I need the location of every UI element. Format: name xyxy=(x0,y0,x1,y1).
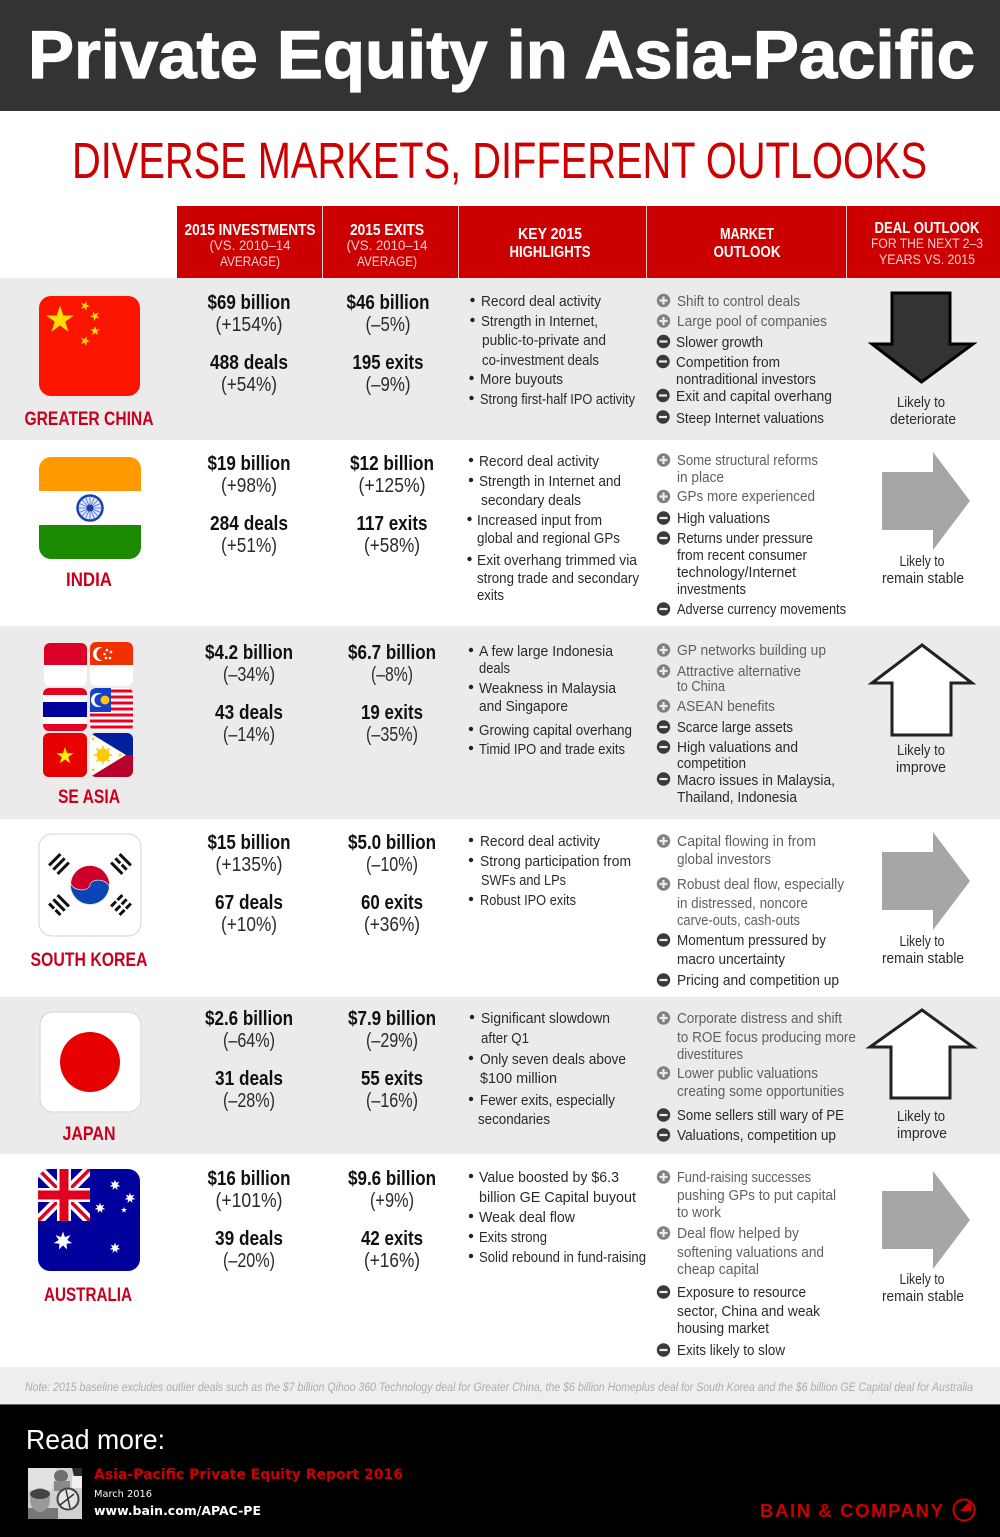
investments stats: (+98%) xyxy=(221,475,277,497)
exits stats: 117 exits xyxy=(356,513,428,535)
deal outlook caption xyxy=(897,1109,947,1142)
report date: March 2016 xyxy=(94,1489,152,1500)
arrow: stable xyxy=(882,1171,970,1269)
key highlights: Significant slowdown xyxy=(481,1011,610,1027)
table header: (VS. 2010–14 xyxy=(210,238,291,253)
icon: Vietnam flag xyxy=(43,733,87,777)
investments stats: (+51%) xyxy=(221,535,277,557)
market outlook: creating some opportunities xyxy=(677,1084,844,1100)
key highlights: Growing capital overhang xyxy=(479,723,632,739)
exits stats: (+125%) xyxy=(358,475,426,497)
key highlights: Exits strong xyxy=(479,1230,547,1246)
investments stats: 39 deals xyxy=(215,1228,283,1250)
exits stats: (–16%) xyxy=(366,1090,418,1112)
market outlook xyxy=(657,643,835,806)
market outlook: Corporate distress and shift xyxy=(677,1011,842,1027)
market outlook: Capital flowing in from xyxy=(677,834,816,850)
key highlights: $100 million xyxy=(480,1071,557,1087)
deal outlook caption xyxy=(890,395,956,428)
key highlights: Exit overhang trimmed via xyxy=(477,553,638,569)
market outlook: Competition from xyxy=(676,355,780,371)
exits stats: (–10%) xyxy=(366,854,418,876)
exits stats: $5.0 billion xyxy=(348,832,436,854)
investments stats: (–64%) xyxy=(223,1030,275,1052)
exits stats: (+9%) xyxy=(370,1190,414,1212)
key highlights: exits xyxy=(477,588,504,604)
investments stats: 31 deals xyxy=(215,1068,283,1090)
table header: AVERAGE) xyxy=(357,254,417,269)
icon: Japan flag xyxy=(40,1012,141,1112)
deal outlook caption: Likely to xyxy=(897,1109,945,1125)
exits stats: 55 exits xyxy=(361,1068,423,1090)
deal outlook caption: Likely to xyxy=(900,934,944,950)
arrow: stable xyxy=(882,452,970,550)
arrow: deteriorate xyxy=(872,293,973,382)
key highlights: global and regional GPs xyxy=(477,531,620,547)
exits stats xyxy=(348,832,436,936)
exits stats: (–29%) xyxy=(366,1030,418,1052)
key highlights: Robust IPO exits xyxy=(480,893,576,909)
market outlook: Exit and capital overhang xyxy=(676,389,832,405)
region name: AUSTRALIA xyxy=(44,1285,132,1306)
icon: Indonesia flag xyxy=(44,643,87,686)
market outlook xyxy=(657,834,845,989)
investments stats: 284 deals xyxy=(210,513,288,535)
market outlook: Fund-raising successes xyxy=(677,1170,811,1186)
panel: South Korea xyxy=(30,832,970,989)
exits stats: $7.9 billion xyxy=(348,1008,436,1030)
investments stats: (–34%) xyxy=(223,664,275,686)
market outlook: ASEAN benefits xyxy=(677,699,775,715)
investments stats: 67 deals xyxy=(215,892,283,914)
deal outlook caption: Likely to xyxy=(900,554,944,570)
panel: Australia xyxy=(38,1168,970,1359)
market outlook xyxy=(657,453,846,618)
key highlights: Fewer exits, especially xyxy=(480,1093,616,1109)
arrow: improve xyxy=(870,1010,973,1098)
report url: www.bain.com/APAC-PE xyxy=(94,1503,261,1518)
panel: Greater China xyxy=(0,278,1000,440)
key highlights xyxy=(469,294,636,408)
region name: GREATER CHINA xyxy=(24,409,154,430)
deal outlook caption: deteriorate xyxy=(890,412,956,428)
market outlook: Steep Internet valuations xyxy=(676,411,824,427)
market outlook: Robust deal flow, especially xyxy=(677,877,845,893)
key highlights: Timid IPO and trade exits xyxy=(479,742,625,758)
investments stats xyxy=(208,292,290,396)
deal outlook caption: improve xyxy=(897,1126,947,1142)
market outlook: pushing GPs to put capital xyxy=(677,1188,836,1204)
exits stats: $46 billion xyxy=(346,292,430,314)
exits stats: (–35%) xyxy=(366,724,418,746)
market outlook: Pricing and competition up xyxy=(677,973,839,989)
table header: 2015 EXITS xyxy=(350,222,424,239)
region name: INDIA xyxy=(66,570,112,591)
key highlights xyxy=(469,1170,646,1266)
key highlights: Weakness in Malaysia xyxy=(479,681,617,697)
table header: MARKET xyxy=(720,226,774,243)
region name: SOUTH KOREA xyxy=(30,950,148,971)
table header: OUTLOOK xyxy=(714,244,781,261)
deal outlook caption: Likely to xyxy=(897,395,945,411)
market outlook: global investors xyxy=(677,852,771,868)
exits stats: (+36%) xyxy=(364,914,420,936)
investments stats xyxy=(205,642,293,746)
exits stats: $9.6 billion xyxy=(348,1168,436,1190)
exits stats: $12 billion xyxy=(350,453,434,475)
market outlook: from recent consumer xyxy=(677,548,807,564)
market outlook: to ROE focus producing more xyxy=(677,1030,856,1046)
key highlights xyxy=(469,834,631,909)
market outlook: Scarce large assets xyxy=(677,720,793,736)
deal outlook caption: improve xyxy=(896,760,946,776)
investments stats: (–28%) xyxy=(223,1090,275,1112)
market outlook: competition xyxy=(677,756,746,772)
key highlights: deals xyxy=(479,661,510,677)
market outlook: in distressed, noncore xyxy=(677,896,808,912)
deal outlook caption: Likely to xyxy=(900,1272,944,1288)
market outlook: High valuations xyxy=(677,511,770,527)
market outlook xyxy=(656,294,832,427)
key highlights: Increased input from xyxy=(477,513,602,529)
market outlook: to work xyxy=(677,1205,722,1221)
panel: Japan xyxy=(0,997,1000,1154)
icon: Australia flag xyxy=(38,1169,140,1271)
deal outlook caption: remain stable xyxy=(882,1289,964,1305)
investments stats: (+154%) xyxy=(216,314,282,336)
exits stats: (–9%) xyxy=(366,374,410,396)
exits stats xyxy=(348,1008,436,1112)
market outlook: cheap capital xyxy=(677,1262,759,1278)
key highlights: and Singapore xyxy=(479,699,568,715)
investments stats: $19 billion xyxy=(208,453,290,475)
key highlights: Record deal activity xyxy=(481,294,602,310)
key highlights: Record deal activity xyxy=(479,454,600,470)
investments stats: (+135%) xyxy=(216,854,282,876)
investments stats: (–14%) xyxy=(223,724,275,746)
exits stats: 60 exits xyxy=(361,892,423,914)
investments stats: (+10%) xyxy=(221,914,277,936)
key highlights: after Q1 xyxy=(481,1031,529,1047)
investments stats: $15 billion xyxy=(208,832,290,854)
market outlook: Shift to control deals xyxy=(677,294,800,310)
exits stats: (–5%) xyxy=(366,314,410,336)
Bain logo: BAIN & COMPANY xyxy=(760,1500,944,1521)
investments stats: (+101%) xyxy=(216,1190,282,1212)
market outlook: divestitures xyxy=(677,1047,743,1063)
key highlights xyxy=(467,454,640,604)
market outlook: Some structural reforms xyxy=(677,453,818,469)
key highlights: secondaries xyxy=(478,1112,550,1128)
market outlook xyxy=(657,1170,836,1359)
market outlook: Thailand, Indonesia xyxy=(677,790,798,806)
market outlook: softening valuations and xyxy=(677,1245,824,1261)
key highlights: Record deal activity xyxy=(480,834,601,850)
market outlook: Exposure to resource xyxy=(677,1285,806,1301)
key highlights: secondary deals xyxy=(481,493,581,509)
arrow: stable xyxy=(882,832,970,930)
read more heading: Read more: xyxy=(26,1424,165,1455)
exits stats xyxy=(346,292,430,396)
investments stats xyxy=(208,453,290,557)
market outlook: technology/Internet xyxy=(677,565,796,581)
table header xyxy=(177,206,1000,278)
region name: JAPAN xyxy=(62,1124,116,1145)
exits stats xyxy=(350,453,434,557)
exits stats: (+58%) xyxy=(364,535,420,557)
table header: DEAL OUTLOOK xyxy=(874,220,980,237)
exits stats: (–8%) xyxy=(371,664,413,686)
key highlights xyxy=(469,644,632,758)
investments stats: 43 deals xyxy=(215,702,283,724)
investments stats: $69 billion xyxy=(208,292,290,314)
market outlook xyxy=(657,1011,856,1144)
market outlook: Lower public valuations xyxy=(677,1066,818,1082)
investments stats: $4.2 billion xyxy=(205,642,293,664)
market outlook: carve-outs, cash-outs xyxy=(677,913,800,929)
region name: SE ASIA xyxy=(58,787,120,808)
exits stats: 42 exits xyxy=(361,1228,423,1250)
icon: India flag xyxy=(39,457,141,559)
icon: Thailand flag xyxy=(43,688,87,731)
market outlook: Returns under pressure xyxy=(677,531,813,547)
panel: SE Asia xyxy=(0,626,1000,819)
icon: Philippines flag xyxy=(90,733,133,777)
market outlook: Slower growth xyxy=(676,335,763,351)
key highlights: Value boosted by $6.3 xyxy=(479,1170,619,1186)
key highlights: Strength in Internet and xyxy=(479,474,621,490)
exits stats: 195 exits xyxy=(352,352,424,374)
deal outlook caption xyxy=(882,554,964,587)
investments stats: $2.6 billion xyxy=(205,1008,293,1030)
icon: report cover xyxy=(28,1468,82,1519)
market outlook: Macro issues in Malaysia, xyxy=(677,773,835,789)
icon: China flag xyxy=(39,296,140,396)
market outlook: Some sellers still wary of PE xyxy=(677,1108,844,1124)
market outlook: Exits likely to slow xyxy=(677,1343,785,1359)
panel: India xyxy=(39,452,970,618)
deal outlook caption xyxy=(896,743,946,776)
market outlook: Adverse currency movements xyxy=(677,602,846,618)
market outlook: Momentum pressured by xyxy=(677,933,827,949)
exits stats: $6.7 billion xyxy=(348,642,436,664)
key highlights: A few large Indonesia xyxy=(479,644,614,660)
exits stats: (+16%) xyxy=(364,1250,420,1272)
deal outlook caption xyxy=(882,1272,964,1305)
market outlook: housing market xyxy=(677,1321,769,1337)
investments stats xyxy=(208,1168,290,1272)
market outlook: Valuations, competition up xyxy=(677,1128,836,1144)
deal outlook caption: remain stable xyxy=(882,571,964,587)
market outlook: sector, China and weak xyxy=(677,1304,821,1320)
investments stats: (+54%) xyxy=(221,374,277,396)
table header: KEY 2015 xyxy=(518,226,582,243)
key highlights: Weak deal flow xyxy=(479,1210,576,1226)
deal outlook caption xyxy=(882,934,964,967)
key highlights xyxy=(469,1011,626,1128)
investments stats: (–20%) xyxy=(223,1250,275,1272)
key highlights: SWFs and LPs xyxy=(481,873,566,889)
key highlights: Only seven deals above xyxy=(480,1052,626,1068)
market outlook: High valuations and xyxy=(677,740,798,756)
investments stats xyxy=(208,832,290,936)
footer xyxy=(0,1404,1000,1537)
key highlights: public-to-private and xyxy=(482,333,606,349)
investments stats xyxy=(205,1008,293,1112)
table header: AVERAGE) xyxy=(220,254,280,269)
market outlook: Deal flow helped by xyxy=(677,1226,800,1242)
icon: Singapore flag xyxy=(90,642,133,686)
footnote xyxy=(0,1367,1000,1404)
table header: HIGHLIGHTS xyxy=(510,244,590,261)
deal outlook caption: remain stable xyxy=(882,951,964,967)
key highlights: co-investment deals xyxy=(482,353,599,369)
market outlook: GPs more experienced xyxy=(677,489,815,505)
market outlook: investments xyxy=(677,582,746,598)
table header: YEARS VS. 2015 xyxy=(879,252,975,267)
key highlights: billion GE Capital buyout xyxy=(479,1190,636,1206)
title banner xyxy=(0,0,1000,111)
title banner: Private Equity in Asia-Pacific xyxy=(28,17,975,93)
exits stats xyxy=(348,642,436,746)
deal outlook caption: Likely to xyxy=(897,743,945,759)
market outlook: to China xyxy=(677,679,726,695)
key highlights: Strength in Internet, xyxy=(481,314,598,330)
key highlights: Strong participation from xyxy=(480,854,631,870)
icon: Malaysia flag xyxy=(90,688,133,731)
key highlights: Strong first-half IPO activity xyxy=(480,392,636,408)
market outlook: in place xyxy=(677,470,724,486)
icon: South Korea flag xyxy=(39,834,141,936)
key highlights: Solid rebound in fund-raising xyxy=(479,1250,646,1266)
table header: (VS. 2010–14 xyxy=(346,238,428,253)
report title: Asia-Pacific Private Equity Report 2016 xyxy=(94,1467,403,1483)
key highlights: strong trade and secondary xyxy=(477,571,640,587)
investments stats: $16 billion xyxy=(208,1168,290,1190)
investments stats: 488 deals xyxy=(210,352,288,374)
table header: FOR THE NEXT 2–3 xyxy=(871,236,983,251)
exits stats: 19 exits xyxy=(361,702,423,724)
exits stats xyxy=(348,1168,436,1272)
key highlights: More buyouts xyxy=(480,372,563,388)
market outlook: nontraditional investors xyxy=(676,372,816,388)
market outlook: GP networks building up xyxy=(677,643,826,659)
table header: 2015 INVESTMENTS xyxy=(184,222,316,239)
market outlook: macro uncertainty xyxy=(677,952,786,968)
arrow: improve xyxy=(872,645,972,735)
market outlook: Attractive alternative xyxy=(677,664,801,680)
market outlook: Large pool of companies xyxy=(677,314,827,330)
